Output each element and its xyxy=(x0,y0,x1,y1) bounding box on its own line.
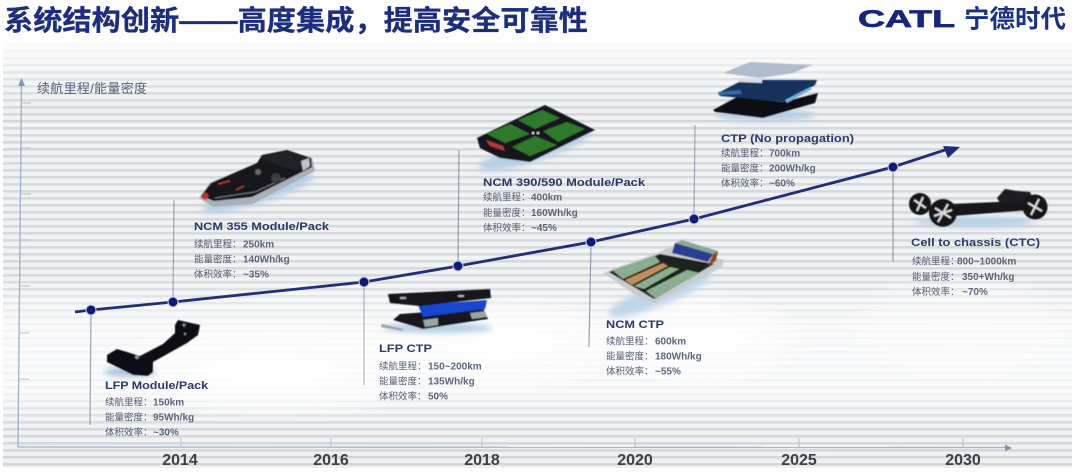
panel: Cell to chassis (CTC): 续航里程： xyxy=(912,256,960,268)
panel: NCM CTP: 180Wh/kg xyxy=(655,352,702,362)
panel: NCM 390/590 Module/Pack: 续航里程： xyxy=(483,192,531,204)
panel: LFP Module/Pack: 体积效率： xyxy=(105,426,153,438)
panel: LFP CTP: 135Wh/kg xyxy=(428,376,475,388)
panel: LFP CTP: LFP CTP xyxy=(379,343,432,355)
panel: Cell to chassis (CTC): ~70% xyxy=(962,287,988,298)
panel: LFP Module/Pack: ~30% xyxy=(153,428,179,438)
logo: CATL 宁德时代: 宁德时代 xyxy=(964,6,1066,34)
panel: NCM 390/590 Module/Pack: 体积效率： xyxy=(483,222,531,234)
panel: LFP CTP: 150~200km xyxy=(428,362,482,372)
panel: NCM 355 Module/Pack xyxy=(194,150,330,280)
panel: NCM CTP: 体积效率： xyxy=(606,366,654,378)
panel: LFP Module/Pack: 150km xyxy=(153,398,184,408)
panel: LFP CTP: 能量密度： xyxy=(379,376,427,388)
panel: LFP Module/Pack: LFP Module/Pack xyxy=(105,380,209,392)
panel: NCM 390/590 Module/Pack: 160Wh/kg xyxy=(531,208,578,219)
panel: NCM 355 Module/Pack: 250km xyxy=(243,240,274,250)
panel: NCM 390/590 Module/Pack: NCM 390/590 Module/Pack xyxy=(483,177,646,189)
logo: CATL 宁德时代 xyxy=(858,6,1066,34)
panel: NCM CTP: 续航里程： xyxy=(606,336,654,348)
panel: NCM CTP: NCM CTP xyxy=(606,319,664,331)
image: NCM 390/590 pack xyxy=(476,105,595,178)
y axis label: 续航里程/能量密度 xyxy=(37,81,147,96)
panel: LFP Module/Pack: 续航里程： xyxy=(105,396,153,408)
panel: CTP (No propagation): 200Wh/kg xyxy=(769,164,816,174)
x axis years: 2020 xyxy=(617,452,653,469)
panel: NCM CTP: 能量密度： xyxy=(606,350,654,362)
arrow head xyxy=(943,146,960,158)
panel: NCM 355 Module/Pack: 140Wh/kg xyxy=(243,254,290,266)
panel: Cell to chassis (CTC) xyxy=(909,189,1048,298)
panel: NCM 390/590 Module/Pack: 能量密度： xyxy=(483,207,531,219)
panel: Cell to chassis (CTC): Cell to chassis (CTC) xyxy=(911,237,1040,249)
panel: CTP (No propagation) xyxy=(713,62,854,190)
growth trend line with milestones xyxy=(75,146,960,315)
panel: CTP (No propagation): 体积效率： xyxy=(721,178,769,190)
connector lines xyxy=(90,125,893,425)
x axis years: 2030 xyxy=(945,452,981,469)
panel: Cell to chassis (CTC): 800~1000km xyxy=(957,256,1016,268)
image: LFP pack xyxy=(104,320,200,377)
panel: LFP Module/Pack: 95Wh/kg xyxy=(153,412,194,424)
image: NCM 355 pack xyxy=(199,150,316,220)
panel: NCM 390/590 Module/Pack: ~45% xyxy=(531,223,557,234)
chart axes xyxy=(18,78,1012,452)
panel: NCM 355 Module/Pack: NCM 355 Module/Pack xyxy=(194,221,330,233)
panel: LFP CTP: 体积效率： xyxy=(379,390,427,402)
panel: Cell to chassis (CTC): 350+Wh/kg xyxy=(962,272,1015,283)
panel: NCM 355 Module/Pack: 体积效率： xyxy=(194,268,242,280)
panel: NCM 390/590 Module/Pack: 400km xyxy=(531,192,562,204)
panel: CTP (No propagation): CTP (No propagation) xyxy=(721,133,854,145)
panel: LFP CTP: 续航里程： xyxy=(379,360,427,372)
image: NCM CTP pack xyxy=(603,240,724,325)
panel: CTP (No propagation): ~60% xyxy=(769,178,795,190)
x axis years: 2018 xyxy=(464,452,500,469)
logo: CATL 宁德时代: CATL xyxy=(858,6,955,33)
x axis years: 2025 xyxy=(781,452,817,469)
panel: NCM CTP: 600km xyxy=(655,336,686,348)
panel: LFP CTP xyxy=(379,289,492,402)
panel: NCM 390/590 Module/Pack xyxy=(476,105,646,234)
panel: NCM CTP xyxy=(603,240,724,378)
panel: CTP (No propagation): 续航里程： xyxy=(721,148,769,160)
panel: NCM CTP: ~55% xyxy=(655,366,681,378)
x axis years xyxy=(162,452,981,469)
panel: NCM 355 Module/Pack: ~35% xyxy=(243,270,269,280)
image: CTP exploded pack xyxy=(713,62,818,121)
panel: CTP (No propagation): 700km xyxy=(769,148,800,160)
panel: LFP Module/Pack xyxy=(104,320,209,438)
x axis years: 2014 xyxy=(162,452,198,469)
panel: NCM 355 Module/Pack: 能量密度： xyxy=(194,254,242,266)
panel: LFP CTP: 50% xyxy=(428,392,448,402)
panel: CTP (No propagation): 能量密度： xyxy=(721,162,769,174)
panel: Cell to chassis (CTC): 能量密度： xyxy=(912,271,960,283)
panel: Cell to chassis (CTC): 体积效率： xyxy=(912,286,960,298)
image: LFP CTP pack xyxy=(381,289,492,333)
image: skateboard chassis xyxy=(909,189,1048,227)
panel: LFP Module/Pack: 能量密度： xyxy=(105,412,153,424)
title: 系统结构创新——高度集成，提高安全可靠性 xyxy=(4,5,588,36)
panel: NCM 355 Module/Pack: 续航里程： xyxy=(194,238,242,250)
x axis years: 2016 xyxy=(313,452,349,469)
